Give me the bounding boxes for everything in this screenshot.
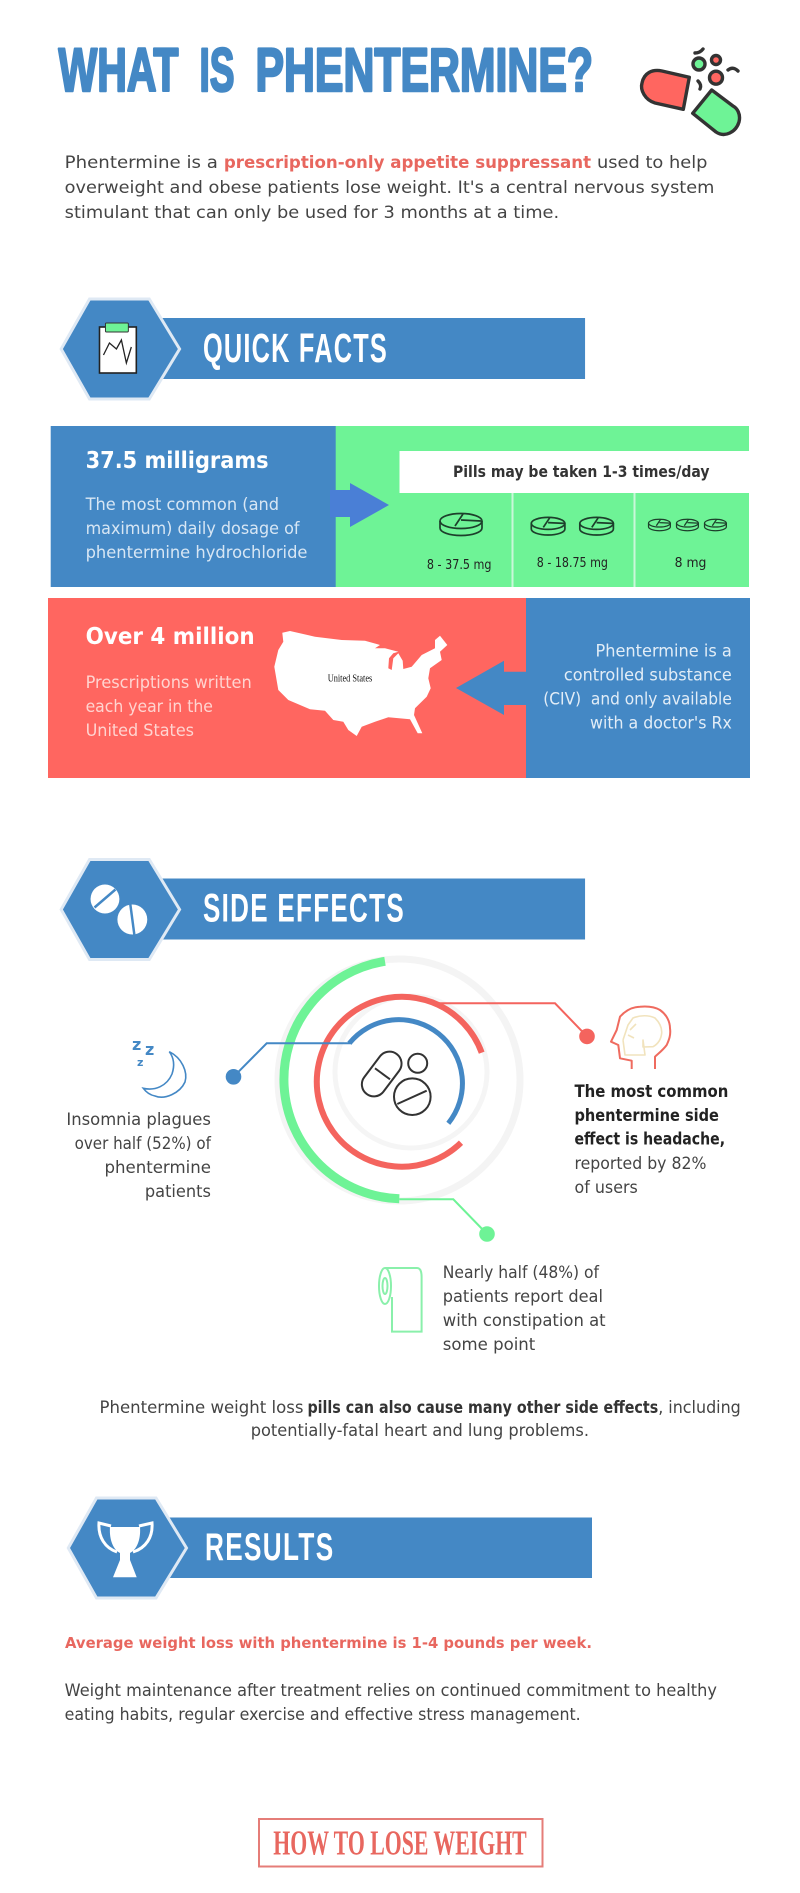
icon: moon: z <box>137 1056 143 1069</box>
button: how to lose weight: HOW TO LOSE WEIGHT <box>273 1823 527 1862</box>
headache text: effect is headache, <box>575 1130 725 1149</box>
headache text: of users <box>575 1178 638 1197</box>
dosage labels: 8 mg <box>675 556 706 571</box>
dosage labels <box>427 556 706 573</box>
green arc <box>284 961 399 1199</box>
other side effects paragraph: Phentermine weight loss <box>99 1398 303 1417</box>
maintenance paragraph: eating habits, regular exercise and effective stress management. <box>65 1705 581 1724</box>
controlled substance text <box>543 642 732 733</box>
heading: QUICK FACTS <box>203 325 388 371</box>
section header: side effects <box>61 860 585 960</box>
map: united states: United States <box>328 674 372 685</box>
stat: over 4 million: Over 4 million <box>86 622 255 650</box>
icon: head <box>611 1006 670 1069</box>
icon: large tablet <box>440 514 482 536</box>
icon: moon: z <box>145 1040 154 1059</box>
prescriptions description: Prescriptions written <box>86 673 252 692</box>
intro paragraph: stimulant that can only be used for 3 months at a time. <box>65 203 559 222</box>
controlled substance text: with a doctor's Rx <box>590 714 732 733</box>
heading: RESULTS <box>205 1526 334 1569</box>
prescriptions description: each year in the <box>86 697 213 716</box>
icon: two medium tablets <box>531 517 613 535</box>
icon: moon: z <box>132 1035 141 1054</box>
maintenance paragraph: Weight maintenance after treatment relies on continued commitment to healthy <box>65 1681 717 1700</box>
icon: open capsule <box>642 49 740 134</box>
controlled substance text: (CIV) and only available <box>543 690 732 709</box>
chart: radial side effects <box>226 959 595 1242</box>
insomnia text: over half (52%) of <box>75 1134 212 1153</box>
connector: green <box>399 1199 495 1242</box>
connector: blue <box>226 1043 350 1085</box>
panel: prescriptions <box>48 598 750 778</box>
title: IS <box>200 36 234 104</box>
blue arc <box>349 1020 462 1123</box>
constipation text: some point <box>443 1335 536 1354</box>
dosage labels: 8 - 18.75 mg <box>537 556 608 571</box>
intro paragraph: overweight and obese patients lose weight. It's a central nervous system <box>65 178 714 197</box>
headache text: reported by 82% <box>575 1154 706 1173</box>
section header: results <box>68 1498 592 1598</box>
key result: Average weight loss with phentermine is 1-4 pounds per week. <box>65 1634 592 1652</box>
intro paragraph: used to help <box>597 153 707 172</box>
other side effects paragraph: potentially-fatal heart and lung problems. <box>251 1421 589 1440</box>
constipation text: with constipation at <box>443 1311 606 1330</box>
prescriptions description <box>86 673 252 740</box>
prescriptions description: United States <box>86 721 194 740</box>
constipation text: Nearly half (48%) of <box>443 1263 600 1282</box>
constipation text: patients report deal <box>443 1287 603 1306</box>
insomnia text <box>66 1110 212 1201</box>
intro paragraph: prescription-only appetite suppressant <box>224 153 591 172</box>
other side effects paragraph <box>99 1398 741 1440</box>
insomnia text: patients <box>145 1182 211 1201</box>
heading: SIDE EFFECTS <box>203 886 405 931</box>
icon: two pills <box>91 884 147 934</box>
icon: pills in centre <box>357 1047 431 1115</box>
dosage description: phentermine hydrochloride <box>86 543 307 562</box>
connector: red <box>438 1003 595 1044</box>
icon: three small tablets <box>649 519 726 531</box>
dosage description: The most common (and <box>85 495 279 514</box>
icon: moon <box>132 1035 186 1097</box>
other side effects paragraph: pills can also cause many other side effects <box>307 1398 658 1417</box>
title: WHAT <box>58 36 178 104</box>
callout: pills per day: Pills may be taken 1-3 times/day <box>453 462 710 481</box>
icon: trophy <box>99 1523 152 1577</box>
callout: pills per day <box>400 451 749 493</box>
dosage description <box>85 495 307 562</box>
dosage description: maximum) daily dosage of <box>86 519 301 538</box>
constipation text <box>443 1263 606 1354</box>
panel: dosage <box>51 426 749 587</box>
insomnia text: Insomnia plagues <box>66 1110 211 1129</box>
other side effects paragraph: , including <box>658 1398 741 1417</box>
intro paragraph <box>65 153 714 222</box>
icon: toilet roll <box>379 1268 422 1332</box>
map: united states <box>274 631 447 736</box>
intro paragraph: Phentermine is a <box>65 153 218 172</box>
title: PHENTERMINE? <box>256 36 593 104</box>
red arc <box>317 997 482 1167</box>
arrow: left <box>456 661 526 715</box>
headache text: phentermine side <box>575 1106 719 1125</box>
controlled substance text: controlled substance <box>564 666 732 685</box>
icon: clipboard <box>100 323 136 373</box>
dosage labels: 8 - 37.5 mg <box>427 558 492 573</box>
controlled substance text: Phentermine is a <box>596 642 732 661</box>
button: how to lose weight <box>259 1819 542 1866</box>
stat: 37.5 milligrams: 37.5 milligrams <box>86 446 269 474</box>
section header: quick facts <box>61 299 585 399</box>
maintenance paragraph <box>65 1681 717 1724</box>
title <box>58 36 593 104</box>
arrow: right <box>330 483 389 527</box>
headache text: The most common <box>575 1082 728 1101</box>
headache text <box>575 1082 728 1197</box>
insomnia text: phentermine <box>104 1158 211 1177</box>
